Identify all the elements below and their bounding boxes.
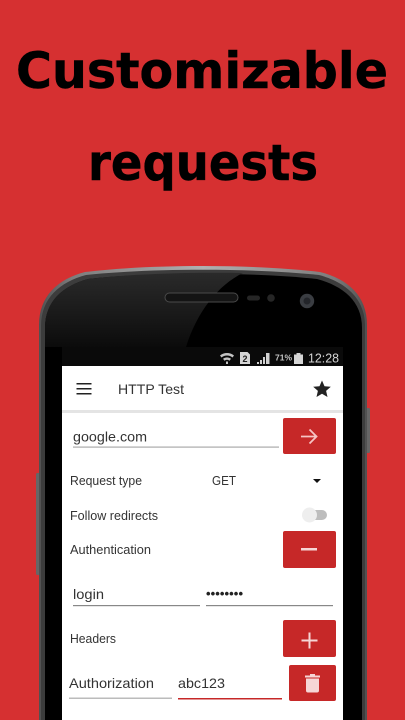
header entry: Authorization: [69, 675, 154, 691]
icon: battery: [294, 353, 303, 364]
right side button: [366, 408, 370, 453]
headers row: Headers: [70, 632, 116, 646]
toolbar: [62, 380, 343, 413]
speaker: [165, 293, 238, 302]
credentials: ••••••••: [206, 586, 243, 601]
delete button: [289, 665, 336, 701]
sensors: [247, 294, 275, 302]
icon: signal: [257, 353, 270, 364]
title: [16, 42, 388, 192]
header entry: abc123: [178, 675, 225, 691]
title: requests: [88, 134, 318, 192]
request type row: Request type: [70, 474, 142, 488]
icon: star: [313, 380, 331, 397]
clock: 12:28: [308, 350, 339, 366]
left side button: [36, 473, 40, 575]
phone: [36, 266, 370, 720]
icon: sim: 2: [242, 354, 248, 364]
phone bezel: [45, 274, 362, 720]
app screen: [62, 366, 343, 720]
url input: google.com: [73, 428, 147, 444]
icon: menu: [76, 383, 92, 394]
phone rim: [39, 266, 367, 720]
credentials: [73, 586, 333, 606]
follow redirects row: [70, 508, 327, 523]
battery percent: 71%: [275, 352, 292, 362]
headers row: [70, 620, 336, 657]
title: Customizable: [16, 42, 388, 100]
authentication row: [70, 531, 336, 568]
icon: wifi: [220, 353, 234, 364]
status bar: [62, 347, 343, 366]
header entry: [69, 675, 282, 700]
camera: [300, 294, 314, 308]
go button: [283, 418, 336, 454]
phone inner edge: [41, 270, 365, 720]
icon: sim: [240, 352, 250, 364]
request type row: [70, 474, 321, 488]
authentication row: Authentication: [70, 543, 151, 557]
follow redirects row: Follow redirects: [70, 509, 158, 523]
app title: HTTP Test: [118, 381, 184, 397]
bezel reflection: [45, 273, 243, 347]
credentials: login: [73, 586, 104, 602]
request type row: GET: [212, 474, 236, 488]
